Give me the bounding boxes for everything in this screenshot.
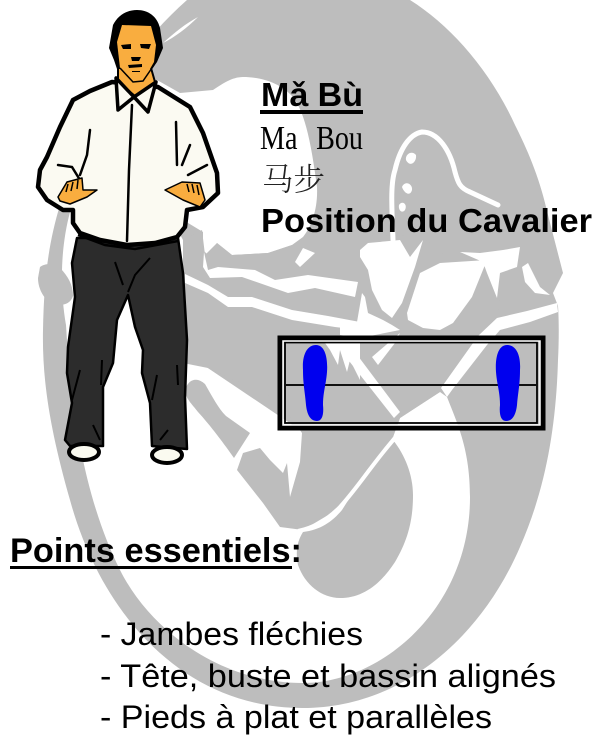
man in stance — [38, 10, 218, 463]
man: chin outline — [120, 65, 154, 82]
man: right shoe — [152, 447, 182, 463]
key points: heading: Points essentiels: — [10, 532, 302, 570]
diagram: outer frame — [280, 338, 543, 428]
title: underline — [260, 110, 363, 114]
title: French name: Position du Cavalier — [261, 203, 592, 240]
emblem: lower thigh — [297, 440, 413, 598]
man: left shoe — [69, 444, 99, 460]
emblem: white swirl interior — [62, 120, 470, 683]
key points: heading underline — [10, 566, 292, 569]
man: shirt — [38, 82, 218, 245]
emblem: white sliver — [163, 17, 198, 43]
key point 2: - Tête, buste et bassin alignés — [100, 658, 556, 694]
key points section — [10, 532, 556, 735]
man: right hand — [165, 182, 205, 207]
emblem: white line between shin and thigh — [298, 437, 396, 531]
man: trouser folds — [72, 258, 178, 440]
man: facial features — [121, 44, 151, 72]
man: shirt placket and folds — [58, 105, 207, 241]
emblem: white oval behind title — [150, 77, 317, 257]
key point 1: - Jambes fléchies — [100, 616, 363, 652]
man: collar — [116, 78, 156, 112]
man: neck — [118, 68, 155, 96]
man: left hand — [58, 178, 97, 204]
man: finger lines — [66, 180, 199, 195]
key point 3: - Pieds à plat et parallèles — [100, 699, 492, 735]
emblem: back hand — [38, 264, 73, 305]
icon: right foot — [496, 345, 520, 421]
emblem: white head outline — [392, 132, 498, 240]
emblem: fighter body — [183, 230, 500, 530]
title: pinyin: Mǎ Bù — [261, 76, 363, 113]
title: Chinese characters: 马步 — [262, 162, 325, 197]
man: hair — [109, 10, 163, 72]
icon: left foot — [303, 345, 327, 421]
foot position diagram — [280, 338, 543, 428]
man: waistband — [78, 235, 178, 249]
title: romanisation: Ma Bou — [260, 120, 363, 157]
diagram: white gap — [283, 341, 540, 425]
emblem: white arm band and muscle outlines — [185, 153, 558, 418]
title block — [260, 76, 592, 240]
man: face — [117, 25, 156, 82]
diagram: centre line — [286, 384, 537, 386]
diagram: inner frame — [285, 342, 537, 423]
man: trousers — [65, 238, 187, 449]
emblem: foot — [185, 380, 250, 458]
